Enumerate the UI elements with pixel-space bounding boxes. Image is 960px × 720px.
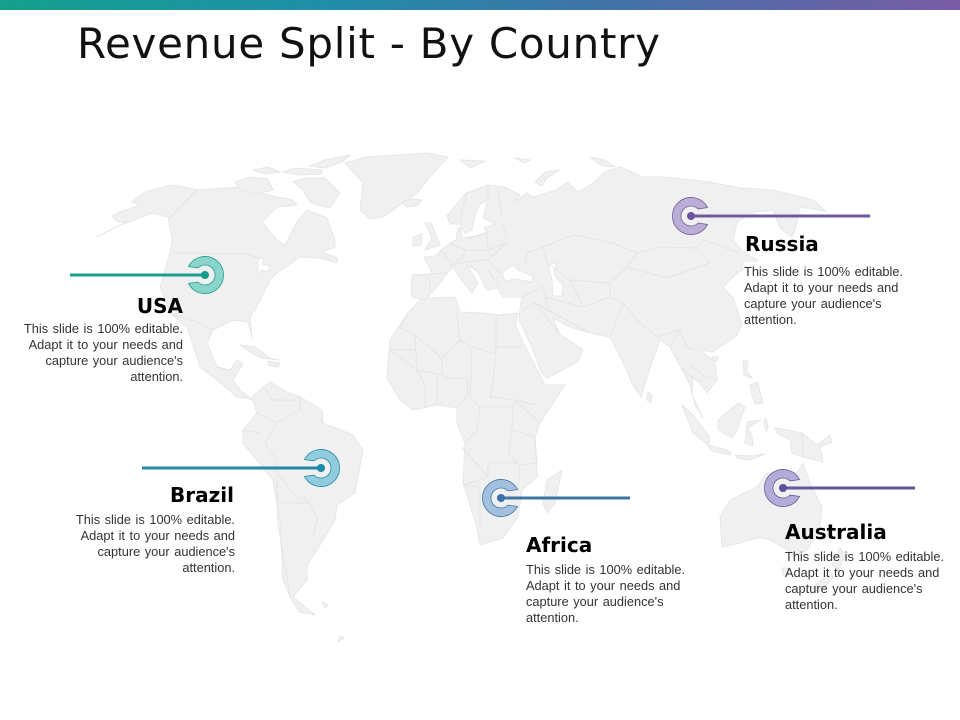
label: USA: Adapt it to your needs and: [29, 337, 183, 352]
label: USA: USA: [137, 294, 184, 318]
label: Brazil: [76, 483, 235, 575]
marker: USA: [70, 256, 223, 294]
Brazil leader line: [142, 466, 321, 470]
label: Australia: Adapt it to your needs and: [785, 565, 939, 580]
label: Australia: [785, 520, 944, 612]
map: Arctic Russia islands: [460, 157, 615, 186]
Russia centre dot: [687, 212, 695, 220]
map: far-south islands: [322, 602, 344, 642]
map: Iceland: [402, 199, 422, 207]
label: Africa: Adapt it to your needs and: [526, 578, 680, 593]
map: Sri Lanka: [647, 392, 652, 403]
label: Russia: attention.: [744, 312, 797, 327]
map: Borneo: [718, 403, 745, 438]
map: country borders: [168, 185, 803, 597]
marker: Russia: [673, 198, 870, 235]
map: Tasmania and New Zealand: [782, 548, 846, 592]
map: Greenland: [345, 153, 448, 219]
Australia leader line: [783, 486, 915, 490]
Australia centre dot: [779, 484, 787, 492]
label: Russia: [744, 232, 903, 327]
Brazil centre dot: [317, 464, 325, 472]
Africa leader line: [501, 496, 630, 500]
USA ring icon: [188, 256, 223, 294]
label: Africa: Africa: [526, 533, 592, 557]
map: South America: [243, 382, 363, 615]
map: Eurasia: [411, 167, 826, 418]
label: Brazil: Brazil: [170, 483, 234, 507]
label: Africa: [526, 533, 685, 625]
label: Brazil: This slide is 100% editable.: [76, 512, 235, 527]
map: Sumatra and Java: [682, 405, 731, 455]
label: Africa: capture your audience's: [526, 594, 663, 609]
marker: Brazil: [142, 450, 339, 486]
map: Australia: [720, 463, 822, 556]
map: New Guinea: [775, 428, 832, 462]
label: USA: [24, 294, 184, 384]
marker: Australia: [765, 469, 915, 507]
Africa centre dot: [497, 494, 505, 502]
Australia ring icon: [765, 469, 800, 507]
label: USA: attention.: [130, 369, 183, 384]
label: USA: This slide is 100% editable.: [24, 321, 183, 336]
map: Black Sea and Caspian Sea: [502, 263, 563, 296]
label: Russia: capture your audience's: [744, 296, 881, 311]
marker: Africa: [483, 479, 630, 516]
Russia ring icon: [673, 198, 708, 235]
label: USA: capture your audience's: [46, 353, 183, 368]
USA centre dot: [201, 271, 209, 279]
top gradient bar: [0, 0, 960, 10]
label: Russia: This slide is 100% editable.: [744, 264, 903, 279]
map: Canadian Arctic islands: [235, 155, 350, 208]
label: Russia: Russia: [745, 232, 819, 256]
title: Revenue Split - By Country: [77, 19, 660, 68]
USA leader line: [70, 274, 205, 276]
world map: [97, 153, 846, 642]
label: Australia: capture your audience's: [785, 581, 922, 596]
Africa ring icon: [483, 479, 518, 516]
map: Africa: [387, 297, 565, 545]
map: Philippines: [743, 360, 763, 404]
map: Caribbean islands: [240, 345, 280, 367]
map: Madagascar: [543, 470, 562, 513]
label: Brazil: Adapt it to your needs and: [81, 528, 235, 543]
map: North America: [97, 185, 337, 403]
label: Australia: This slide is 100% editable.: [785, 549, 944, 564]
map: British Isles: [413, 223, 440, 250]
label: Africa: attention.: [526, 610, 579, 625]
map: Great Lakes: [258, 258, 270, 274]
label: Africa: This slide is 100% editable.: [526, 562, 685, 577]
map: Sulawesi and Timor chain: [735, 418, 768, 460]
label: Brazil: attention.: [182, 560, 235, 575]
label: Australia: Australia: [785, 520, 887, 544]
map: Hainan: [712, 357, 718, 361]
label: Russia: Adapt it to your needs and: [744, 280, 898, 295]
label: Australia: attention.: [785, 597, 838, 612]
Brazil ring icon: [304, 450, 339, 486]
white text box behind Russia copy: [744, 262, 924, 352]
Russia leader line: [691, 214, 870, 218]
label: Brazil: capture your audience's: [98, 544, 235, 559]
